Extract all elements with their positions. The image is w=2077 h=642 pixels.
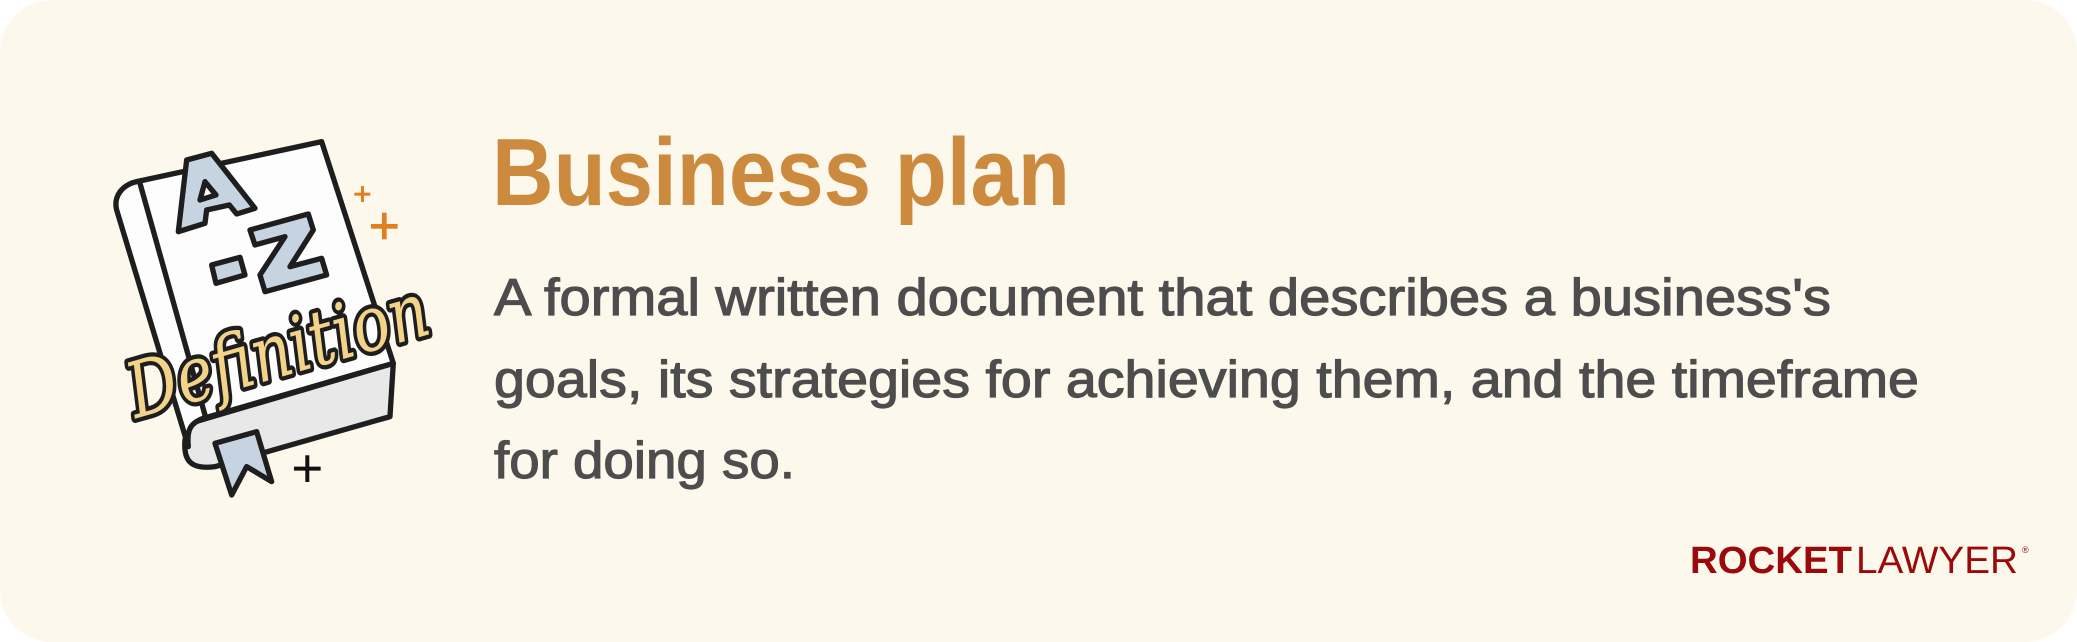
- text block: definition: for doing so.: [494, 432, 795, 490]
- title: Business plan: [492, 119, 1070, 226]
- logo: Rocket Lawyer: ®: [2022, 545, 2029, 555]
- text block: definition: A formal written document that describes a business's: [494, 269, 1831, 327]
- text block: definition: [494, 269, 1919, 490]
- logo: Rocket Lawyer: LAWYER: [1856, 540, 2018, 582]
- logo: Rocket Lawyer: ROCKET: [1690, 540, 1852, 582]
- icon: A-Z definition book: [115, 142, 439, 495]
- logo: Rocket Lawyer: [1690, 540, 2029, 582]
- text block: definition: goals, its strategies for achieving them, and the timeframe: [494, 351, 1919, 409]
- icon: A-Z definition book: Definition: [115, 266, 439, 437]
